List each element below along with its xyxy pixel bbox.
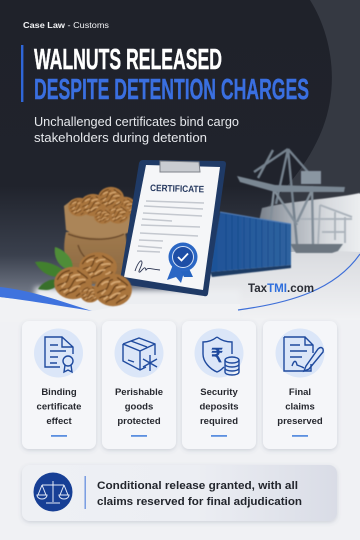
divider [84, 476, 86, 509]
icon: certificate document [34, 328, 83, 378]
card: security deposits required [182, 321, 256, 449]
label [115, 387, 163, 427]
shipping container [210, 212, 291, 277]
walnuts foreground [54, 252, 132, 306]
label: effect [46, 416, 73, 427]
icon: rupee shield and coins: ₹ [211, 346, 223, 367]
label: preserved [277, 416, 323, 427]
accent [292, 435, 308, 437]
burlap sack [64, 200, 130, 284]
label: claims [285, 402, 315, 412]
label: Final [289, 387, 311, 398]
signature [135, 261, 160, 272]
accent [131, 435, 147, 437]
icon: box with snowflake [114, 328, 164, 378]
subtitle: stakeholders during detention [34, 131, 207, 145]
conclusion banner [22, 465, 337, 521]
label: goods [125, 402, 153, 412]
conclusion text: Conditional release granted, with all [97, 480, 298, 492]
leaves [35, 247, 73, 290]
clipboard with certificate [120, 160, 226, 296]
card: perishable goods protected [102, 321, 176, 449]
accent [51, 435, 67, 437]
conclusion text [97, 480, 302, 508]
logo: TaxTMI.com [248, 281, 314, 295]
label: certificate [37, 402, 81, 412]
label [37, 387, 81, 427]
certificate clip [160, 161, 200, 172]
subtitle: Unchallenged certificates bind cargo [34, 115, 239, 129]
title [34, 44, 309, 106]
label: Security [200, 387, 238, 398]
walnuts in sack [68, 187, 136, 224]
port crane [237, 149, 352, 253]
label: required [200, 416, 238, 427]
hero background [0, 0, 360, 322]
icon: scales of justice [34, 472, 72, 512]
certificate text lines [137, 201, 204, 252]
label: Binding [41, 387, 77, 398]
card: binding certificate effect [22, 321, 96, 449]
accent [211, 435, 227, 437]
seal ribbon badge [167, 242, 198, 283]
card: final claims preserved [263, 321, 337, 449]
label [199, 387, 239, 427]
title: WALNUTS RELEASED [34, 44, 222, 76]
title accent bar [21, 45, 23, 102]
label [277, 387, 323, 427]
label: deposits [199, 402, 239, 412]
certificate heading: CERTIFICATE [150, 182, 204, 194]
label: protected [117, 416, 161, 427]
category label: Case Law - Customs [23, 20, 109, 30]
subtitle [34, 115, 239, 145]
label: Perishable [115, 387, 163, 398]
conclusion text: claims reserved for final adjudication [97, 496, 302, 508]
icon: document and pen [276, 328, 324, 378]
